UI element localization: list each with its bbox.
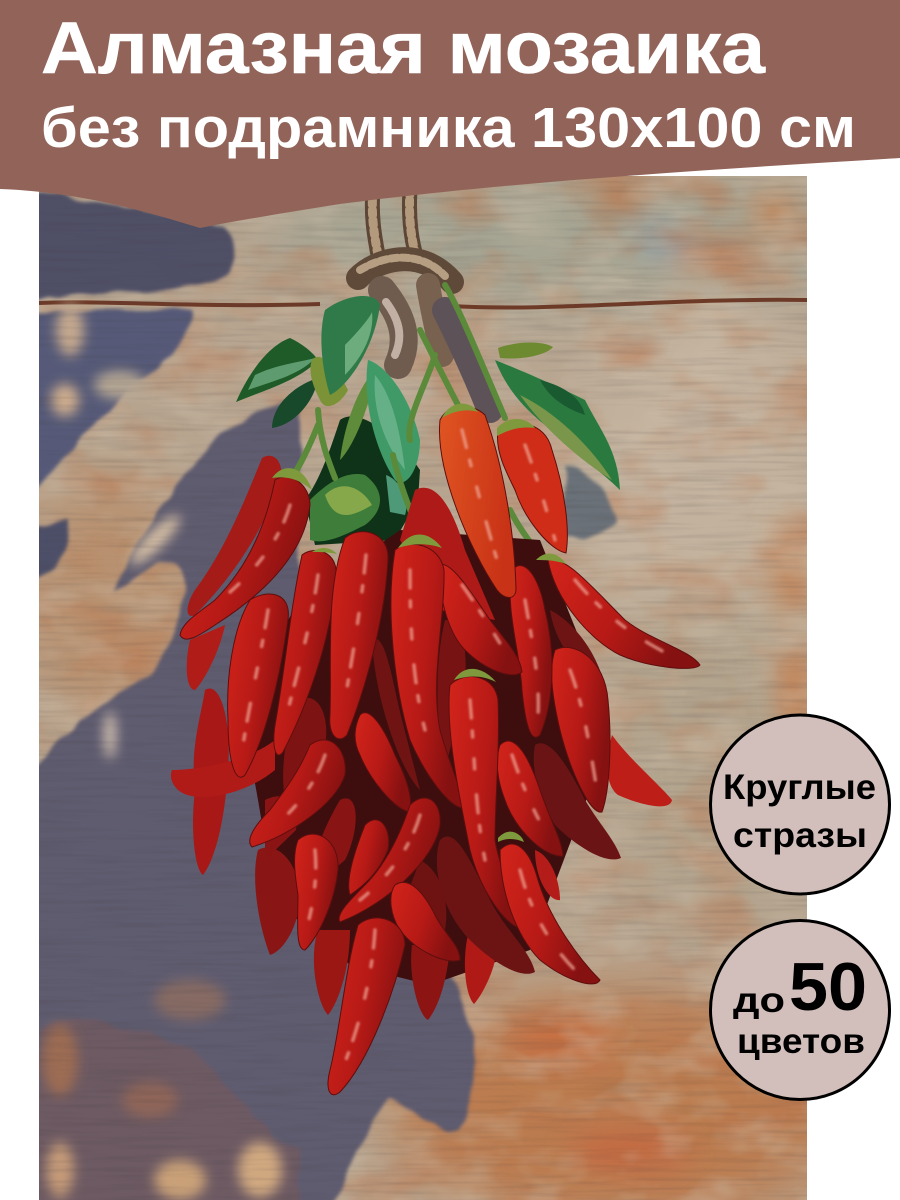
- rope: [358, 190, 490, 410]
- brush texture: [39, 176, 807, 1200]
- wall crack: [39, 300, 807, 308]
- chili peppers: back layer: [171, 456, 672, 1020]
- badge: round rhinestones: стразы: [733, 816, 867, 855]
- pepper calyxes: [272, 404, 566, 842]
- badge: round rhinestones: [710, 715, 890, 894]
- subtitle: без подрамника 130х100 см: [41, 96, 856, 160]
- leaves and stems: [236, 285, 620, 565]
- badge: round rhinestones: Круглые: [723, 768, 876, 807]
- banner: [0, 0, 900, 228]
- badge: up to 50 colours: цветов: [737, 1022, 865, 1061]
- badge: up to 50 colours: 50: [789, 949, 867, 1025]
- pepper highlights: [230, 430, 670, 1070]
- shadow colour patches: [42, 304, 282, 1200]
- wall mottling: [39, 176, 807, 1200]
- chili peppers: front layer: [180, 406, 700, 1095]
- title: Алмазная мозаика: [41, 8, 767, 89]
- badge: up to 50 colours: до: [733, 981, 785, 1020]
- badge: up to 50 colours: [710, 920, 890, 1100]
- cast shadow on wall: [30, 190, 614, 1200]
